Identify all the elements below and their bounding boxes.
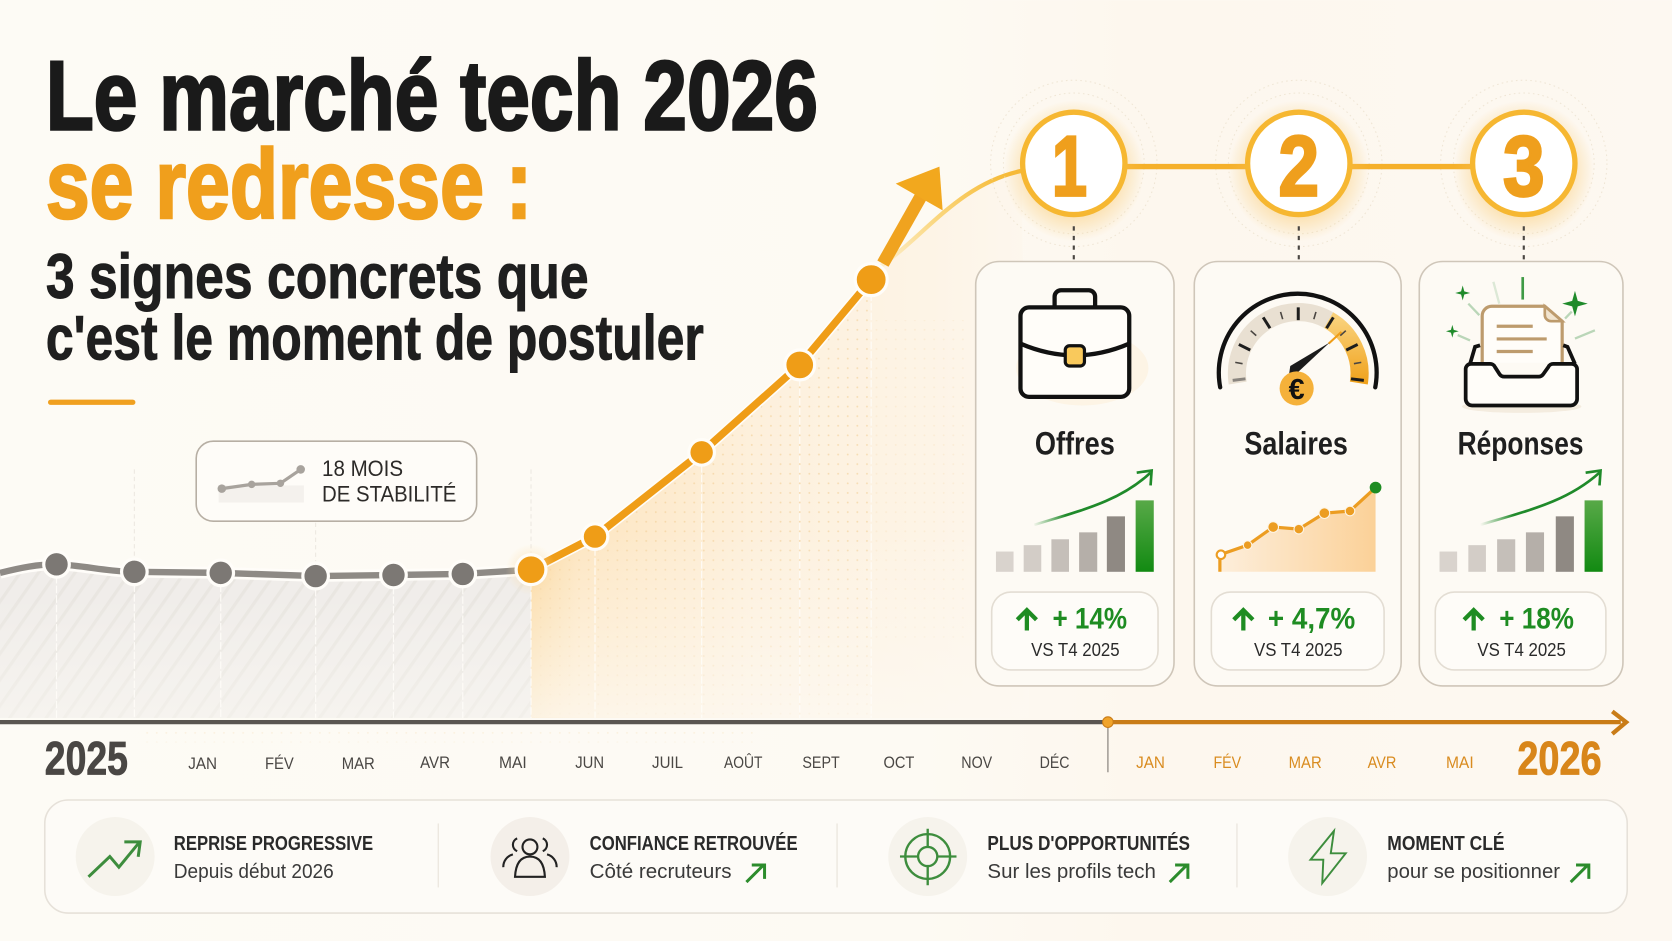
item: reprise progressive: Depuis début 2026 [174,861,334,883]
stat: +4,7% [1211,592,1384,670]
step 2 badge: 2 [1279,119,1319,214]
icon: briefcase [1016,290,1148,405]
timeline axis [0,711,1626,772]
months 2026: MAI [1446,753,1474,772]
item: reprise progressive [76,817,373,896]
title: se redresse : [46,129,532,239]
item: moment clé [1288,817,1589,896]
icon: inbox with document [1446,277,1595,413]
item: confiance retrouvée [491,817,798,896]
title underline [48,400,135,405]
callout: 18 mois de stabilité: 18 MOIS [322,456,403,481]
months 2025: AOÛT [724,753,763,772]
label: réponses: Réponses [1458,426,1583,462]
item: moment clé: MOMENT CLÉ [1387,832,1505,855]
icon: gauge: € [1289,374,1305,406]
months 2025: FÉV [265,754,294,773]
panel: réponses [1419,262,1623,686]
months 2025: JAN [188,754,217,773]
months 2026: JAN [1136,753,1165,772]
subtitle: 3 signes concrets que [46,242,589,312]
panel: bottom summary [45,800,1627,913]
stat: +18%: VS T4 2025 [1477,640,1566,660]
step 3 badge: 3 [1503,119,1545,214]
callout: 18 mois de stabilité: DE STABILITÉ [322,481,456,506]
bar chart: réponses [1440,470,1603,572]
subtitle [46,242,704,374]
months 2025: MAR [342,754,375,773]
arrow: growth arrow [883,167,943,264]
item: confiance retrouvée: Côté recruteurs [590,861,731,883]
faint dots under axis [139,725,757,742]
faded line to circle 1 [880,171,1022,267]
callout: 18 mois de stabilité [196,441,477,521]
months 2025: SEPT [802,753,840,772]
year 2025: 2025 [45,732,128,784]
months 2025: JUIL [652,753,683,772]
step connectors [1125,164,1473,169]
orange area: recovery period [531,171,1029,718]
stat: +4,7%: + 4,7% [1268,602,1355,635]
months 2025: AVR [420,753,450,772]
icon: gauge [1219,294,1377,406]
months 2025: MAI [499,753,527,772]
stat: +14%: VS T4 2025 [1031,640,1120,660]
grey line and points [0,552,531,589]
year 2026: 2026 [1517,732,1602,784]
panel: offres [976,262,1174,686]
panel: salaires [1194,262,1401,686]
item: moment clé: pour se positionner [1387,861,1560,883]
label: offres: Offres [1035,426,1115,462]
months 2026: MAR [1289,753,1322,772]
stat: +4,7%: VS T4 2025 [1254,640,1343,660]
stat: +14%: + 14% [1052,602,1127,635]
item: plus d'opportunités: Sur les profils tech [987,861,1156,883]
dotted links [1074,226,1524,262]
months 2025: OCT [883,753,915,772]
line chart: salaires [1217,482,1381,572]
months 2025: NOV [961,753,993,772]
grey area: stable period [0,564,531,718]
item: plus d'opportunités [888,817,1190,896]
stat: +14% [992,592,1158,670]
halo rings [991,80,1607,247]
step 3 badge [1453,100,1594,241]
chart: market trend curve [0,167,1029,718]
months 2025: DÉC [1040,753,1070,772]
orange line and points [505,264,887,595]
label: salaires: Salaires [1244,426,1348,462]
months 2026 [1136,753,1474,772]
title [46,40,818,239]
stat: +18%: + 18% [1499,602,1574,635]
stat: +18% [1435,592,1606,670]
months 2026: AVR [1368,753,1396,772]
months 2025: JUN [575,753,604,772]
months 2025 [188,753,1070,773]
item: confiance retrouvée: CONFIANCE RETROUVÉE [590,832,798,855]
bar chart: offres [996,470,1154,572]
step 2 badge [1228,100,1369,241]
step 1 badge: 1 [1052,119,1087,214]
months 2026: FÉV [1213,753,1242,772]
item: plus d'opportunités: PLUS D'OPPORTUNITÉS [987,832,1190,855]
subtitle: c'est le moment de postuler [46,304,704,374]
item: reprise progressive: REPRISE PROGRESSIVE [174,833,373,855]
step 1 badge [1003,100,1144,241]
title: Le marché tech 2026 [46,40,818,150]
